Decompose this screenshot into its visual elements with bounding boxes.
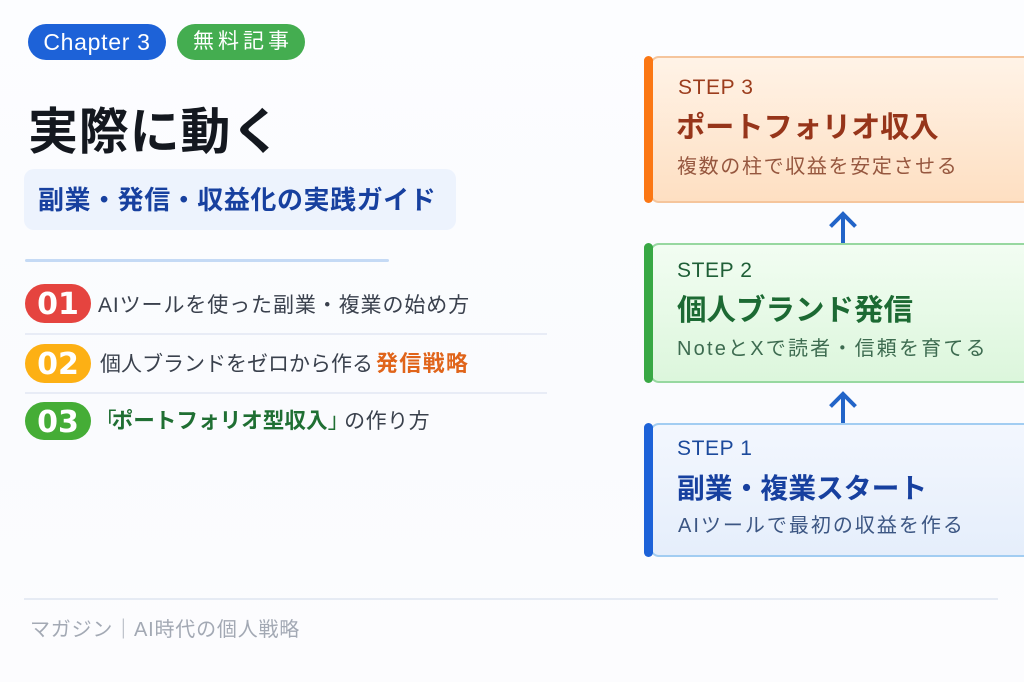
list item 03 — [25, 402, 430, 440]
step 2 label: STEP 2 — [677, 259, 753, 282]
step 2 accent bar — [644, 243, 653, 383]
step 3 accent bar — [644, 56, 653, 203]
title: 実際に動く — [28, 104, 282, 160]
arrow: step 1 to step 2 — [829, 391, 857, 423]
subtitle box — [24, 169, 456, 230]
badge: Chapter 3 — [28, 24, 166, 60]
step 2 heading: 個人ブランド発信 — [677, 294, 913, 327]
subtitle text: 副業・発信・収益化の実践ガイド — [38, 185, 436, 215]
list item 02 — [25, 344, 469, 383]
number badge 03: 03 — [37, 405, 79, 440]
step 3 label: STEP 3 — [678, 76, 754, 99]
panel: step 2 — [644, 243, 1024, 383]
step 2 card background — [650, 243, 1024, 383]
step 1 description: AIツールで最初の収益を作る — [678, 515, 965, 537]
step 3 description: 複数の柱で収益を安定させる — [677, 156, 958, 178]
footer text: マガジン｜AI時代の個人戦略 — [30, 619, 300, 641]
badge: Chapter 3: Chapter 3 — [43, 29, 151, 55]
step 1 accent bar — [644, 423, 653, 557]
number badge 01: 01 — [37, 287, 79, 322]
badge: free article: 無料記事 — [193, 30, 293, 53]
step 2 description: NoteとXで読者・信頼を育てる — [677, 338, 988, 360]
list item 01 — [25, 284, 470, 323]
number badge 02 — [25, 344, 91, 383]
arrow: step 2 to step 3 — [829, 211, 857, 243]
number badge 02: 02 — [37, 347, 79, 382]
number badge 03 — [25, 402, 91, 440]
step 3 card background — [650, 56, 1024, 203]
number badge 01 — [25, 284, 91, 323]
item 03 text: 「ポートフォリオ型収入」の作り方 — [95, 408, 430, 433]
panel: step 1 — [644, 423, 1024, 557]
step 3 heading: ポートフォリオ収入 — [676, 112, 939, 144]
panel: step 3 — [644, 56, 1024, 203]
item 01 text: AIツールを使った副業・複業の始め方 — [98, 294, 470, 317]
badge: free article — [177, 24, 305, 60]
step 1 heading: 副業・複業スタート — [677, 473, 927, 504]
step 1 card background — [650, 423, 1024, 557]
item 02 text: 個人ブランドをゼロから作る発信戦略 — [100, 351, 469, 376]
step 1 label: STEP 1 — [677, 437, 753, 460]
